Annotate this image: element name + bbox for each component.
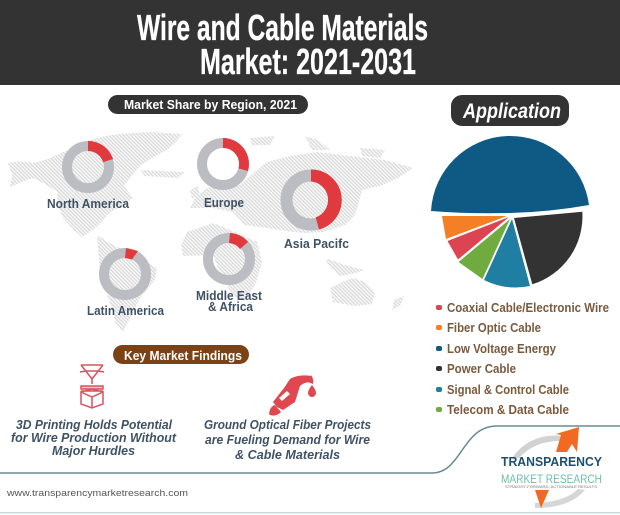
donut: Europe xyxy=(202,138,249,210)
logo: Transparency Market Research: MARKET RESEARCH xyxy=(501,472,602,486)
logo: Transparency Market Research: TRANSPARENCY xyxy=(501,454,602,469)
label: Middle East and Africa xyxy=(196,288,263,314)
label: Middle East and Africa: & Africa xyxy=(208,299,254,314)
finding text: 3D printing: 3D Printing Holds Potential xyxy=(16,417,172,432)
finding text: optical fiber: are Fueling Demand for Wire xyxy=(205,432,370,447)
logo: Transparency Market Research: STRAIGHT-FORWARD, ACTIONABLE RESULTS xyxy=(505,484,597,489)
pill: market share heading: Market Share by Region, 2021 xyxy=(124,97,297,112)
title: Wire and Cable Materials xyxy=(137,7,428,48)
label: Middle East and Africa: Middle East xyxy=(196,288,263,303)
header banner xyxy=(0,0,620,85)
label: Europe: Europe xyxy=(204,195,244,210)
legend item: low voltage: Low Voltage Energy xyxy=(447,342,556,356)
world map xyxy=(8,132,413,332)
legend: application xyxy=(436,301,609,417)
donut: Middle East and Africa xyxy=(196,233,263,314)
donut: North America xyxy=(47,141,130,211)
finding text: 3D printing xyxy=(11,417,177,458)
label: Latin America: Latin America xyxy=(87,303,165,318)
legend item: coaxial: Coaxial Cable/Electronic Wire xyxy=(447,301,609,315)
finding text: 3D printing: Major Hurdles xyxy=(52,443,135,458)
title: Market: 2021-2031 xyxy=(200,41,416,82)
pill: key market findings: Key Market Findings xyxy=(124,348,242,363)
pill: application heading: Application xyxy=(462,100,561,123)
website url: www.transparencymarketresearch.com xyxy=(6,488,188,499)
pill: application heading xyxy=(451,95,569,126)
legend item: power: Power Cable xyxy=(447,362,516,376)
footer divider curve xyxy=(0,426,620,473)
donut: Asia Pacific xyxy=(284,169,349,251)
logo: Transparency Market Research xyxy=(501,427,602,508)
label: Asia Pacific: Asia Pacifc xyxy=(284,236,349,251)
finding text: optical fiber: Ground Optical Fiber Projects xyxy=(204,417,371,432)
finding text: 3D printing: for Wire Production Without xyxy=(11,430,177,445)
label: North America: North America xyxy=(47,196,130,211)
donut: Latin America xyxy=(87,248,165,318)
finding text: optical fiber xyxy=(204,417,371,462)
legend item: signal: Signal & Control Cable xyxy=(447,383,569,397)
icon: fuel nozzle xyxy=(269,375,316,416)
pie chart: application xyxy=(431,136,589,287)
legend item: fiber optic: Fiber Optic Cable xyxy=(447,321,541,335)
finding text: optical fiber: & Cable Materials xyxy=(235,447,340,462)
bottom rule xyxy=(0,512,620,514)
icon: 3D printer xyxy=(80,365,104,408)
legend item: telecom: Telecom & Data Cable xyxy=(447,403,569,417)
title xyxy=(137,7,428,82)
